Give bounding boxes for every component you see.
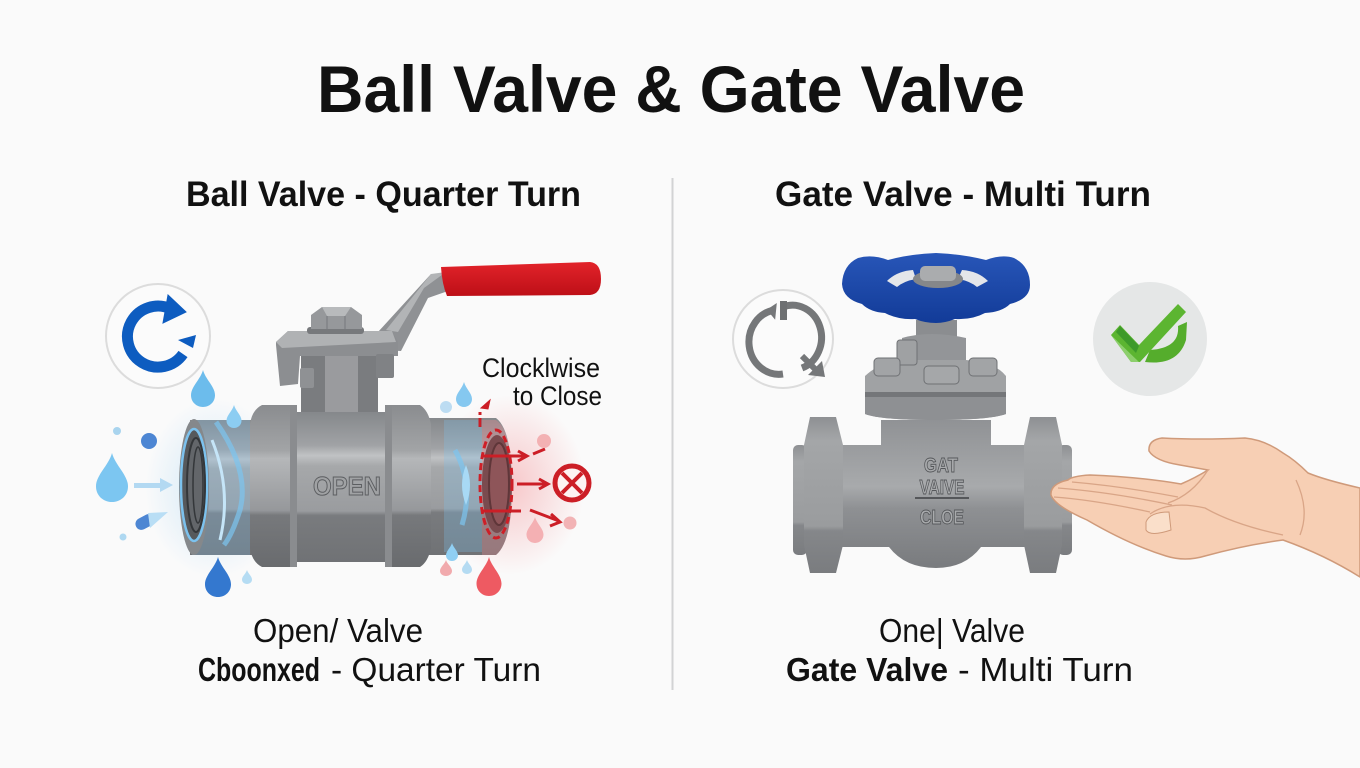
caption: ball valve	[198, 612, 541, 688]
label: clockwise to close: to Close	[513, 381, 602, 411]
embossed label: gate valve close: VAIVE	[920, 477, 964, 499]
arrows: red outflow	[480, 400, 560, 526]
gate valve body	[793, 417, 1072, 573]
caption: gate valve: Gate Valve	[786, 651, 948, 688]
caption: gate valve	[786, 612, 1133, 688]
icon: multi-turn arrows	[733, 290, 833, 388]
heading: gate valve: Gate Valve - Multi Turn	[775, 175, 1151, 214]
bonnet and bolts	[865, 334, 1006, 420]
embossed label: gate valve close: GAT	[924, 455, 958, 477]
panel: ball valve illustration	[96, 262, 602, 597]
red handle lever	[378, 262, 601, 351]
title: Ball Valve & Gate Valve	[317, 52, 1025, 126]
caption: ball valve: Open/ Valve	[253, 612, 423, 649]
embossed label: gate valve close	[915, 455, 969, 529]
valve body	[145, 395, 585, 578]
panel: gate valve illustration	[733, 253, 1360, 577]
label: clockwise to close: Clocklwise	[482, 353, 600, 383]
caption: gate valve: - Multi Turn	[958, 651, 1133, 688]
heading: ball valve: Ball Valve - Quarter Turn	[186, 175, 581, 214]
icon: blue rotation arrow	[106, 284, 210, 388]
icon: water droplets red	[440, 434, 576, 596]
caption: ball valve: - Quarter Turn	[331, 651, 541, 688]
left flange	[793, 417, 843, 573]
hub nut	[913, 266, 963, 288]
gate stem	[916, 320, 957, 338]
icon: water droplets blue	[96, 370, 472, 597]
hand	[1051, 438, 1360, 577]
arrow: inflow	[134, 478, 173, 492]
icon: green check	[1093, 282, 1207, 396]
caption: ball valve: Cboonxed	[198, 651, 320, 688]
icon: red no-flow symbol	[555, 466, 589, 500]
embossed label: open: OPEN	[313, 471, 381, 501]
right flange	[1024, 417, 1072, 573]
embossed label: gate valve close: CLOE	[920, 507, 964, 529]
valve stem and bracket	[276, 307, 398, 412]
blue handwheel	[842, 253, 1030, 323]
caption: gate valve: One| Valve	[879, 612, 1025, 649]
